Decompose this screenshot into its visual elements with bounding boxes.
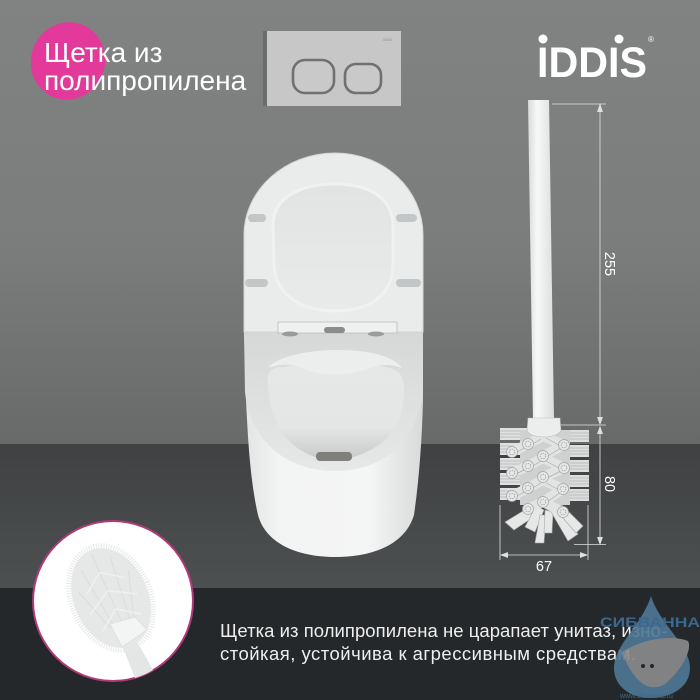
logo: IDDIS (537, 39, 647, 87)
title highlight blob (20, 12, 116, 110)
close-up handle (120, 634, 153, 678)
toilet (244, 153, 423, 557)
bowl rim (244, 332, 423, 471)
rear bowl highlight (268, 350, 402, 374)
brush diagram (500, 100, 617, 575)
bristle bottom tufts (505, 505, 583, 543)
flush plate: IDDIS (383, 38, 393, 42)
logo: ® (648, 35, 654, 44)
brush close-up circle (33, 521, 193, 681)
title: полипропилена (44, 65, 247, 96)
brush bristle mass (500, 428, 589, 543)
bowl inner (268, 366, 404, 461)
bristle tips (522, 438, 534, 450)
close-up collar (110, 617, 147, 647)
dimension: 80 (574, 427, 606, 544)
seat bumpers (245, 214, 421, 287)
lid inner panel (273, 184, 393, 311)
floor (0, 444, 700, 589)
brush diagram: 255 (601, 252, 617, 276)
dimension: 255 (552, 104, 606, 425)
diagonal tufts (512, 436, 564, 512)
watermark (600, 596, 700, 700)
flush button large (293, 60, 334, 93)
hinge cover (278, 322, 397, 336)
caption second line: стойкая, устойчива к агрессивным средствам. (220, 643, 636, 664)
title: Щетка из (44, 37, 162, 68)
watermark drop (614, 596, 690, 698)
bottom caption band (0, 588, 700, 700)
watermark bath (622, 638, 689, 687)
toilet body (244, 330, 423, 557)
wall background (0, 0, 700, 445)
brush handle (528, 100, 554, 420)
brush collar (527, 418, 561, 437)
brush diagram: 67 (536, 559, 552, 575)
watermark name: СИБВАННА (600, 614, 700, 630)
brush diagram: 80 (601, 476, 617, 492)
raised seat lid (244, 153, 423, 332)
close-up bristles (53, 533, 169, 663)
watermark url: www.sibvanna.ru (619, 693, 673, 700)
flush button small (345, 64, 381, 93)
flush plate (263, 31, 401, 106)
drain (316, 452, 352, 461)
caption: Щетка из полипропилена не царапает унитаз, изно- (220, 620, 667, 641)
dimension: 67 (500, 505, 588, 560)
